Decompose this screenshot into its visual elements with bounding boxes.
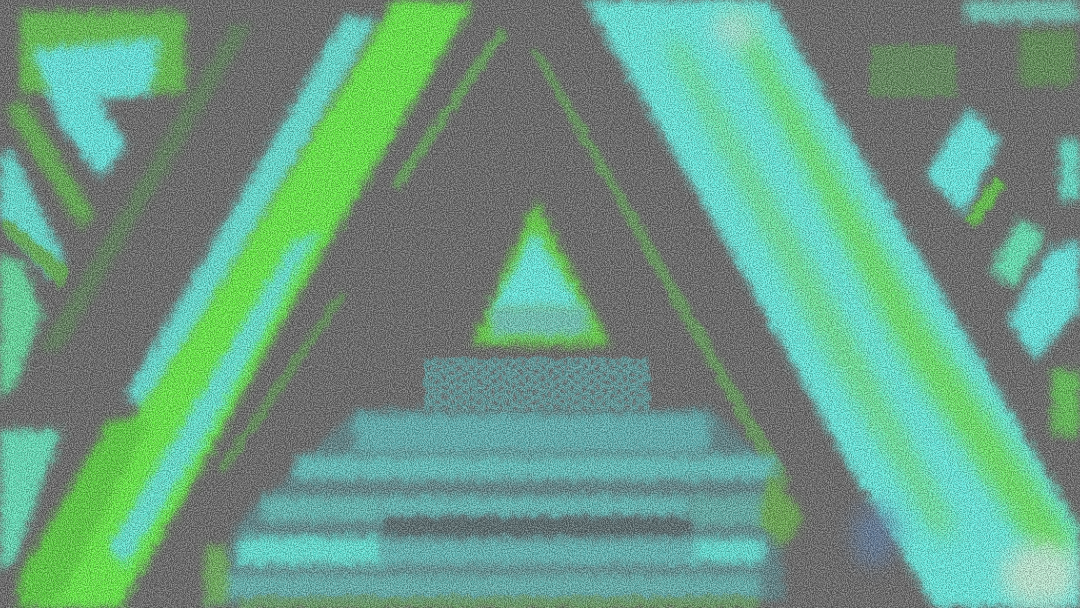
thin green edge: [391, 28, 507, 190]
green lower diagonal: [0, 220, 72, 288]
left inner thin edge: [217, 290, 347, 475]
teal fade: [492, 306, 588, 336]
right diagonal band: [585, 0, 1080, 608]
green diagonal: [5, 100, 95, 228]
dim backing of the stack: [205, 410, 785, 604]
right inner thin edge: [530, 50, 790, 486]
cyan diamond: [925, 108, 1000, 215]
green outer triangle: [472, 200, 610, 345]
dark slot: [385, 518, 690, 536]
cyan main band: [585, 0, 1080, 608]
cyan strip: [125, 15, 378, 410]
cyan block: [1008, 240, 1080, 360]
left cyan-green block: [0, 255, 42, 400]
lower left block: [0, 430, 62, 570]
stacked bars: [205, 358, 805, 608]
pale highlight top: [713, 12, 757, 48]
dark green lower tip: [18, 420, 150, 608]
right edge cyan: [1060, 140, 1080, 200]
cyan inner triangle: [490, 232, 582, 310]
center triangle: [472, 200, 610, 345]
green right edge: [758, 470, 805, 548]
bar 5 left: [238, 536, 383, 566]
green left edge: [205, 545, 227, 605]
bar 6: [215, 574, 760, 598]
bar 4 right: [690, 496, 775, 526]
right edge green: [1052, 370, 1080, 435]
top stripes: [870, 45, 956, 97]
bar 4 left: [262, 496, 382, 522]
cyan lower strip: [108, 230, 320, 568]
bar 3: [296, 456, 776, 480]
cyan chevron: [32, 38, 160, 178]
bar 4 middle: [380, 496, 690, 516]
green streak one: [665, 40, 955, 540]
bar 5 right: [695, 538, 765, 564]
bottom green edge: [240, 598, 760, 608]
inner triangle outlines: [217, 50, 790, 486]
faint outer green streak: [40, 25, 252, 350]
bar 5 middle: [380, 540, 700, 566]
cyan dash: [990, 218, 1045, 288]
left diagonal band: [18, 0, 507, 608]
cyan diagonal: [0, 150, 65, 280]
pale highlight bottom: [1002, 543, 1078, 607]
violet shadow: [853, 505, 897, 565]
top pale strip: [965, 0, 1080, 22]
green corner: [1020, 30, 1075, 85]
top green block: [20, 12, 185, 92]
green streak two: [725, 15, 1075, 575]
dotted top bar: [424, 358, 650, 410]
bright green strip: [30, 0, 472, 608]
left side fragments: [0, 12, 185, 570]
bar 2: [355, 414, 710, 452]
green dash: [965, 178, 1005, 228]
right side fragments: [870, 0, 1080, 435]
